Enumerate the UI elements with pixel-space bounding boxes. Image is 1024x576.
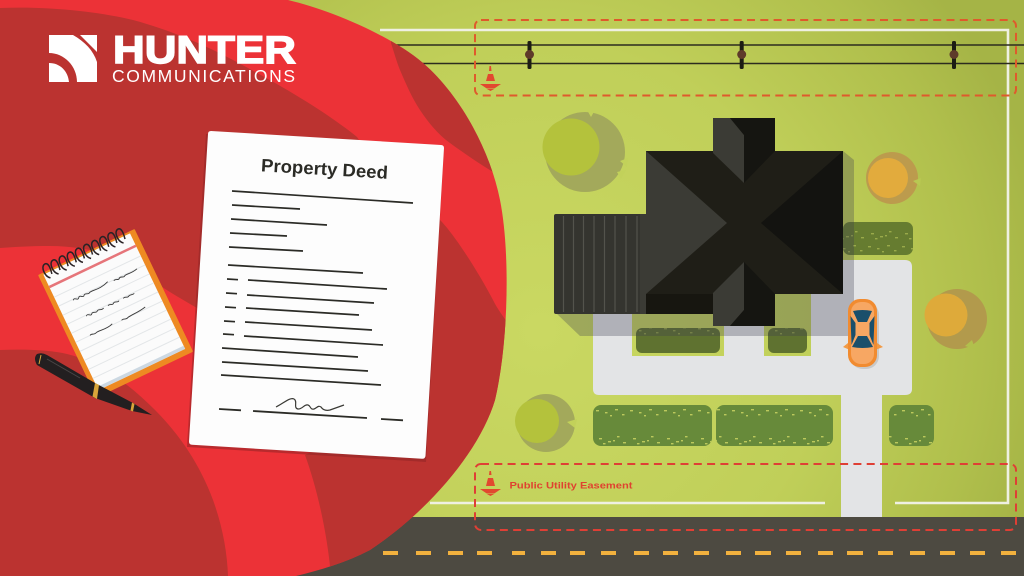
house roof bbox=[554, 118, 843, 326]
easement dashed box: top bbox=[475, 20, 1016, 96]
dark swoosh lower right bbox=[305, 220, 506, 566]
logo subline: COMMUNICATIONS bbox=[112, 66, 295, 86]
logo bbox=[49, 29, 296, 86]
icon: traffic cone bottom bbox=[480, 471, 501, 496]
dark swoosh top right bbox=[391, 41, 492, 172]
road bbox=[0, 517, 1024, 576]
hedges bbox=[593, 222, 934, 446]
paper title: Property Deed bbox=[261, 155, 388, 183]
property boundary line bbox=[380, 30, 1008, 503]
signature line bbox=[219, 409, 403, 420]
label: public utility easement: Public Utility Easement bbox=[510, 480, 633, 492]
car bbox=[843, 299, 883, 369]
icon: traffic cone top bbox=[480, 66, 501, 91]
trees bbox=[515, 110, 987, 452]
logo icon bbox=[49, 35, 97, 82]
paper: property deed bbox=[187, 131, 444, 462]
logo wordmark: HUNTER bbox=[113, 29, 296, 72]
house shadow bbox=[557, 151, 854, 336]
driveway bbox=[593, 260, 912, 517]
notepad bbox=[35, 223, 193, 398]
paper text lines bbox=[221, 191, 413, 385]
dark swoosh top left bbox=[0, 8, 359, 308]
garage roof bbox=[554, 214, 646, 314]
red panel bbox=[0, 0, 525, 576]
dark swoosh bottom left bbox=[0, 350, 228, 576]
easement dashed box: bottom bbox=[475, 464, 1016, 530]
notepad scribbles bbox=[72, 268, 154, 336]
pen bbox=[35, 353, 152, 415]
notepad spiral bbox=[41, 228, 127, 279]
signature bbox=[276, 399, 344, 410]
utility lines and poles bbox=[395, 41, 1024, 69]
paper sheet bbox=[189, 131, 444, 459]
paper shadow bbox=[187, 134, 444, 462]
